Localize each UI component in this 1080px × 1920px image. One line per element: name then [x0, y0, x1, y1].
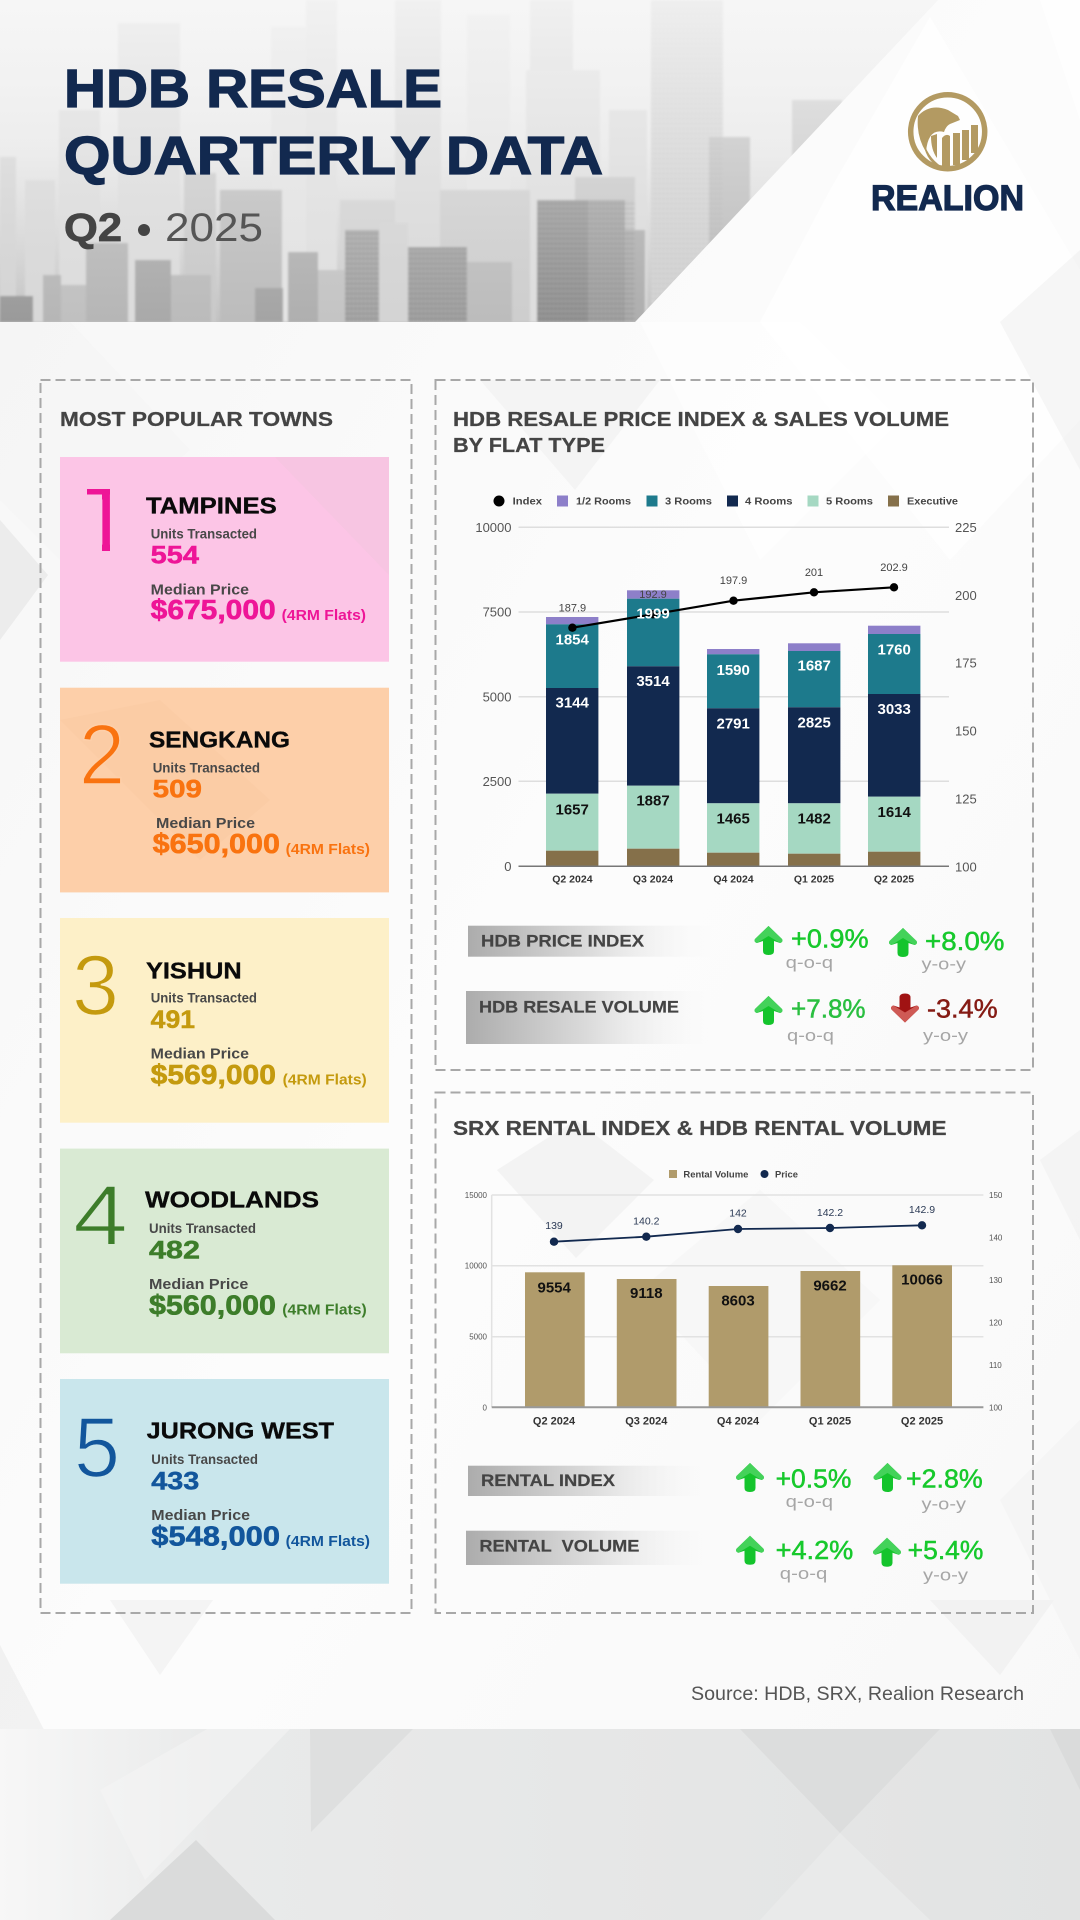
stacked bar chart: sales volume by flat type with index line: 5000	[483, 689, 512, 704]
chart legend: flat types: Index	[513, 496, 542, 508]
x axis labels: Q4 2024	[717, 1416, 760, 1428]
bar value labels	[538, 1271, 943, 1310]
rental price line	[545, 1204, 935, 1246]
bar value labels: 1999	[636, 605, 670, 622]
subtitle: quarter: 2025	[165, 206, 263, 250]
card: rank 1 Tampines: (4RM Flats)	[282, 607, 366, 624]
card: rank 1 Tampines: 1	[81, 475, 128, 570]
stacked bar chart: sales volume by flat type with index line: 150	[955, 723, 977, 738]
stat row: HDB price index: q-o-q	[786, 953, 833, 972]
bar value labels: 1854	[556, 632, 590, 649]
bars Q4 2024	[707, 649, 759, 866]
price index line: 202.9	[880, 562, 908, 574]
stat row: HDB resale volume: +7.8%	[791, 994, 866, 1024]
card: rank 1 Tampines: 554	[151, 541, 199, 569]
icon: up arrow	[874, 1463, 901, 1492]
icon: up arrow	[755, 926, 782, 955]
rental price line: 140.2	[633, 1216, 660, 1228]
chart legend: flat types: 5 Rooms	[826, 496, 873, 508]
card: rank 2 Sengkang: 509	[153, 775, 202, 803]
stat row: HDB resale volume: y-o-y	[923, 1026, 969, 1045]
card: rank 5 Jurong West: JURONG WEST	[147, 1418, 334, 1444]
card: rank 3 Yishun: Units Transacted	[151, 991, 257, 1006]
stat row: rental index: q-o-q	[786, 1492, 833, 1511]
card: rank 5 Jurong West: $548,000	[151, 1520, 280, 1551]
title: HDB RESALE	[64, 59, 442, 119]
heading: resale price index: HDB RESALE PRICE INDEX & SALES VOLUME	[453, 409, 949, 431]
chart legend: rental	[669, 1169, 798, 1179]
source note: Source: HDB, SRX, Realion Research	[691, 1684, 1024, 1705]
card: rank 2 Sengkang: $650,000	[153, 828, 280, 859]
stacked bar chart: sales volume by flat type with index line: 2500	[483, 774, 512, 789]
chart legend: flat types: Executive	[907, 496, 958, 508]
stat row: rental volume: y-o-y	[923, 1566, 969, 1584]
x axis labels: Q3 2024	[633, 874, 673, 886]
bar value labels: 1657	[556, 801, 589, 818]
panel: HDB resale price index and volume	[436, 380, 1033, 1070]
bar value labels: 1614	[878, 804, 912, 821]
bars Q1 2025	[788, 643, 840, 866]
rental price line: 142.9	[909, 1204, 935, 1216]
stat row: HDB resale volume: q-o-q	[787, 1026, 834, 1045]
card: rank 1 Tampines: Median Price	[151, 582, 249, 598]
stat row: HDB price index: HDB PRICE INDEX	[481, 932, 645, 951]
card: rank 4 Woodlands: $560,000	[149, 1289, 276, 1320]
bar and line chart: rental volume and price: 5000	[469, 1333, 488, 1342]
card: rank 1 Tampines: Units Transacted	[151, 527, 257, 542]
card: rank 2 Sengkang: Median Price	[156, 816, 255, 832]
subtitle: quarter	[64, 206, 263, 250]
bar value labels: 9662	[813, 1277, 847, 1294]
bar value labels: 9554	[538, 1279, 572, 1296]
card: rank 2 Sengkang: Units Transacted	[153, 760, 260, 775]
rental price line: 139	[545, 1220, 563, 1232]
stat row: rental volume	[466, 1531, 983, 1584]
title: QUARTERLY DATA	[64, 126, 603, 186]
bar and line chart: rental volume and price: 130	[989, 1276, 1003, 1285]
rental volume bars	[525, 1265, 952, 1407]
card: rank 5 Jurong West	[60, 1379, 389, 1584]
bars Q2 2025	[868, 626, 920, 866]
logo: Realion	[871, 95, 1024, 218]
price index line: 201	[805, 567, 823, 579]
heading: resale price index	[453, 409, 949, 457]
x axis labels: Q2 2024	[533, 1416, 576, 1428]
bar value labels: 2791	[717, 716, 750, 733]
card: rank 5 Jurong West: (4RM Flats)	[286, 1533, 370, 1550]
card: rank 4 Woodlands: 482	[149, 1236, 200, 1264]
card: rank 4 Woodlands: Median Price	[149, 1277, 248, 1293]
card: rank 5 Jurong West: 433	[151, 1467, 199, 1495]
stat row: rental volume: +5.4%	[908, 1535, 983, 1565]
stat row: HDB price index: +0.9%	[791, 924, 869, 954]
bar and line chart: rental volume and price: 0	[483, 1403, 488, 1412]
skyline hero image	[0, 0, 940, 322]
card: rank 2 Sengkang: (4RM Flats)	[286, 841, 370, 858]
bar value labels: 1887	[636, 792, 670, 809]
rental price line: 142	[729, 1208, 747, 1220]
stacked bar chart: sales volume by flat type with index line: 0	[504, 859, 512, 874]
rental price line: 142.2	[817, 1207, 843, 1219]
bottom strip	[0, 1729, 1080, 1920]
x axis labels	[533, 1416, 943, 1428]
icon: up arrow	[736, 1463, 764, 1492]
bar and line chart: rental volume and price: 140	[989, 1233, 1003, 1242]
bar value labels: 3144	[556, 694, 590, 711]
card: rank 3 Yishun: Median Price	[151, 1047, 249, 1063]
subtitle: quarter: Q2	[64, 206, 122, 250]
card: rank 1 Tampines: TAMPINES	[146, 492, 277, 518]
x axis labels	[552, 874, 914, 886]
bar and line chart: rental volume and price	[465, 1191, 1003, 1428]
card: rank 4 Woodlands: WOODLANDS	[145, 1187, 319, 1213]
bar value labels: 3514	[636, 673, 670, 690]
x axis labels: Q4 2024	[713, 874, 754, 886]
heading: rental index: SRX RENTAL INDEX & HDB RENTAL VOLUME	[453, 1118, 946, 1140]
stacked bar chart: sales volume by flat type with index line: 7500	[483, 605, 512, 620]
card: rank 5 Jurong West: Units Transacted	[151, 1452, 258, 1467]
card: rank 5 Jurong West: 5	[74, 1400, 120, 1496]
logo: Realion: REALION	[871, 179, 1024, 218]
stat row: rental index	[468, 1463, 983, 1514]
stat row: rental volume: q-o-q	[780, 1564, 827, 1583]
icon: up arrow	[736, 1536, 764, 1565]
stacked bar chart: sales volume by flat type with index line: 200	[955, 588, 977, 603]
bar value labels: 3033	[878, 701, 911, 718]
card: rank 3 Yishun: 491	[151, 1006, 195, 1034]
card: rank 5 Jurong West: Median Price	[151, 1508, 250, 1524]
panel: most popular towns	[40, 380, 412, 1613]
stacked bar chart: sales volume by flat type with index line: 10000	[475, 520, 512, 535]
heading: most popular towns: MOST POPULAR TOWNS	[60, 409, 333, 431]
price index line: 187.9	[559, 602, 586, 614]
stat row: rental index: y-o-y	[922, 1494, 967, 1514]
bar and line chart: rental volume and price: 100	[989, 1403, 1003, 1412]
price index line: 192.9	[639, 589, 667, 601]
stat row: HDB price index: y-o-y	[922, 954, 967, 974]
stat row: rental index: RENTAL INDEX	[481, 1471, 616, 1490]
chart legend: flat types: 3 Rooms	[665, 496, 712, 508]
bar value labels: 10066	[901, 1271, 943, 1288]
chart legend: rental: Price	[775, 1169, 798, 1179]
chart legend: flat types	[494, 496, 958, 508]
icon: up arrow	[873, 1538, 901, 1567]
icon: up arrow	[755, 996, 782, 1025]
card: rank 1 Tampines: $675,000	[151, 594, 276, 625]
x axis labels: Q2 2025	[874, 874, 914, 886]
chart legend: flat types: 1/2 Rooms	[576, 496, 631, 508]
stat row: rental index: +2.8%	[906, 1464, 983, 1494]
stacked bar chart: sales volume by flat type with index line: 125	[955, 792, 977, 807]
stat row: rental volume: +4.2%	[776, 1535, 853, 1565]
card: rank 3 Yishun: (4RM Flats)	[283, 1071, 367, 1088]
card: rank 2 Sengkang	[60, 688, 389, 892]
x axis labels: Q2 2025	[901, 1416, 943, 1428]
stacked bar chart: sales volume by flat type with index line: 225	[955, 520, 977, 535]
price index line	[559, 562, 908, 632]
card: rank 3 Yishun: YISHUN	[146, 957, 242, 983]
stacked bar chart: sales volume by flat type with index line: 100	[955, 859, 977, 874]
card: rank 3 Yishun: 3	[72, 938, 119, 1034]
bars Q2 2024	[546, 617, 598, 866]
card: rank 2 Sengkang: 2	[79, 708, 125, 803]
card: rank 4 Woodlands	[60, 1149, 389, 1353]
chart legend: rental: Rental Volume	[683, 1169, 748, 1179]
x axis labels: Q2 2024	[552, 874, 593, 886]
heading: resale price index: BY FLAT TYPE	[453, 435, 605, 457]
card: rank 3 Yishun: $569,000	[151, 1059, 276, 1090]
x axis labels: Q3 2024	[625, 1416, 668, 1428]
bar value labels: 1687	[798, 657, 831, 674]
stat row: HDB resale volume: -3.4%	[927, 994, 998, 1024]
card: rank 4 Woodlands: (4RM Flats)	[282, 1302, 367, 1319]
bar value labels: 1590	[717, 662, 750, 679]
stat row: HDB price index	[468, 924, 1004, 974]
stat row: rental index: +0.5%	[776, 1464, 851, 1494]
card: rank 4 Woodlands: 4	[73, 1169, 128, 1264]
card: rank 1 Tampines	[60, 457, 389, 662]
bar and line chart: rental volume and price: 110	[989, 1361, 1002, 1370]
bar value labels: 8603	[721, 1293, 755, 1310]
stat row: rental volume: RENTAL VOLUME	[479, 1537, 639, 1556]
chart legend: flat types: 4 Rooms	[745, 496, 793, 508]
bar value labels: 1465	[717, 811, 750, 828]
card: rank 4 Woodlands: Units Transacted	[149, 1221, 256, 1236]
x axis labels: Q1 2025	[809, 1416, 851, 1428]
stat row: HDB resale volume: HDB RESALE VOLUME	[479, 997, 679, 1016]
icon: up arrow	[889, 928, 917, 957]
icon: down arrow	[891, 994, 919, 1022]
bar value labels: 2825	[798, 715, 831, 732]
title	[64, 59, 603, 186]
stat row: HDB price index: +8.0%	[925, 926, 1004, 956]
bar value labels: 1482	[798, 811, 831, 828]
bars Q3 2024	[627, 590, 679, 866]
bar value labels: 1760	[878, 642, 911, 659]
bar value labels: 9118	[630, 1285, 663, 1302]
stacked bar chart: sales volume by flat type with index line	[475, 520, 977, 886]
bar and line chart: rental volume and price: 150	[989, 1191, 1003, 1200]
stacked bar chart: sales volume by flat type with index line: 175	[955, 656, 977, 671]
bar value labels	[556, 605, 912, 828]
x axis labels: Q1 2025	[794, 874, 834, 886]
price index line: 197.9	[720, 575, 747, 587]
card: rank 3 Yishun	[60, 918, 389, 1123]
panel: SRX rental index and volume	[436, 1092, 1033, 1613]
bar and line chart: rental volume and price: 120	[989, 1319, 1003, 1328]
stat row: HDB resale volume	[466, 991, 998, 1045]
bar and line chart: rental volume and price: 15000	[465, 1191, 488, 1200]
card: rank 2 Sengkang: SENGKANG	[149, 726, 290, 752]
bar and line chart: rental volume and price: 10000	[465, 1262, 488, 1271]
